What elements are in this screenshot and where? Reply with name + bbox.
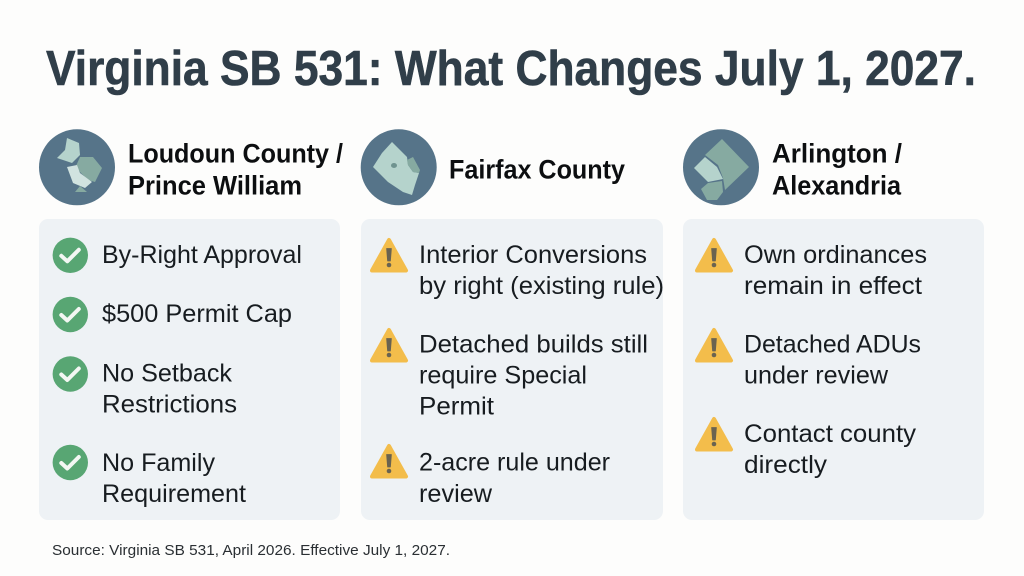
- icon: Loudoun and Prince William map: [39, 129, 115, 205]
- item: Detached ADUs: [697, 330, 921, 390]
- item: Own ordinances: Own ordinances: [744, 241, 927, 269]
- column: Arlington / Alexandria: [683, 129, 984, 520]
- item: Interior Conversions: by right (existing rule): [419, 272, 664, 300]
- item: Interior Conversions: [372, 240, 664, 300]
- item: Detached builds: require Special: [419, 362, 587, 390]
- column: Fairfax County: [361, 129, 664, 520]
- item: No Setback Restrictions: No Setback: [102, 360, 232, 388]
- heading: Arlington / Alexandria: [772, 138, 903, 200]
- panel: Fairfax County list: [361, 219, 664, 520]
- heading: Arlington / Alexandria: Arlington /: [772, 138, 903, 168]
- item: Contact county: Contact county: [744, 420, 917, 448]
- item: Detached ADUs: under review: [744, 362, 889, 390]
- heading: Loudoun County / Prince William: Loudoun County /: [128, 138, 344, 168]
- panel: Loudoun County list: [39, 219, 340, 520]
- item: Detached builds: Detached builds still: [419, 330, 648, 358]
- item: Detached builds: Permit: [419, 392, 494, 420]
- item: Contact county: [697, 419, 917, 479]
- item: Contact county: directly: [744, 451, 828, 479]
- item: By-Right Approval: [53, 238, 302, 273]
- panel: Arlington / Alexandria list: [683, 219, 984, 520]
- source note: Source: Virginia SB 531, April 2026. Effective July 1, 2027.: [52, 543, 450, 559]
- item: 2-acre rule: review: [419, 480, 493, 508]
- heading: Arlington / Alexandria: Alexandria: [772, 170, 901, 200]
- heading: Loudoun County / Prince William: Prince William: [128, 170, 302, 200]
- item: No Family Requirement: No Family: [102, 449, 215, 477]
- item: 2-acre rule: [372, 446, 610, 508]
- icon: Arlington and Alexandria map: [683, 129, 759, 205]
- item: $500 Permit Cap: $500 Permit Cap: [102, 300, 292, 328]
- heading: Fairfax County: Fairfax County: [449, 154, 625, 184]
- item: No Family Requirement: [53, 445, 246, 508]
- item: 2-acre rule: 2-acre rule under: [419, 448, 610, 476]
- item: No Setback Restrictions: [53, 356, 237, 418]
- item: $500 Permit Cap: [53, 297, 292, 332]
- column: Loudoun County / Prince William: [39, 129, 344, 520]
- item: Detached ADUs: Detached ADUs: [744, 330, 921, 358]
- item: Own ordinances: remain in effect: [744, 272, 922, 300]
- heading: Loudoun County / Prince William: [128, 138, 344, 200]
- item: By-Right Approval: By-Right Approval: [102, 241, 302, 269]
- icon: Fairfax map: [361, 129, 437, 205]
- item: No Setback Restrictions: Restrictions: [102, 390, 237, 418]
- item: No Family Requirement: Requirement: [102, 480, 246, 508]
- item: Interior Conversions: Interior Conversions: [419, 241, 647, 269]
- item: Detached builds: [372, 330, 648, 420]
- item: Own ordinances: [697, 240, 927, 300]
